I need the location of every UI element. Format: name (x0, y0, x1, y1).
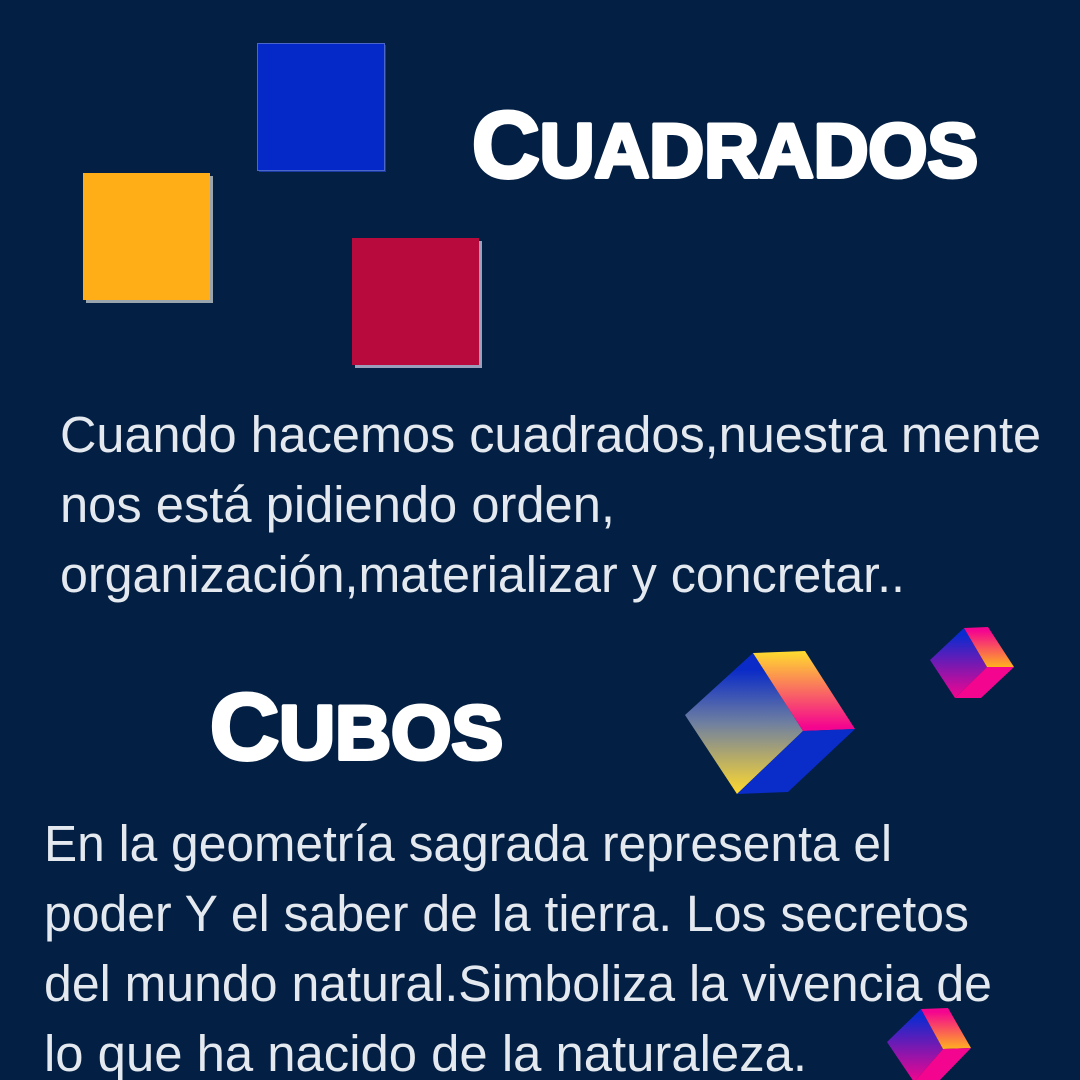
text block: cubos: del mundo natural.Simboliza la vivencia de (44, 955, 992, 1012)
small cube bottom (887, 1008, 971, 1080)
text block: cuadrados: organización,materializar y concretar.. (60, 546, 905, 603)
heading: Cuadrados: CUADRADOS (472, 92, 978, 197)
text block: cubos: En la geometría sagrada representa el (44, 815, 892, 872)
red square (352, 238, 482, 368)
large cube (685, 651, 855, 794)
text block: cubos (44, 815, 992, 1080)
heading: Cubos: CUBOS (210, 674, 503, 779)
text block: cubos: poder Y el saber de la tierra. Los secretos (44, 885, 969, 942)
blue square (258, 44, 386, 172)
text block: cuadrados (60, 406, 1041, 603)
small cube top right (930, 627, 1014, 698)
yellow square (83, 173, 213, 303)
text block: cuadrados: nos está pidiendo orden, (60, 476, 615, 533)
text block: cuadrados: Cuando hacemos cuadrados,nuestra mente (60, 406, 1041, 463)
